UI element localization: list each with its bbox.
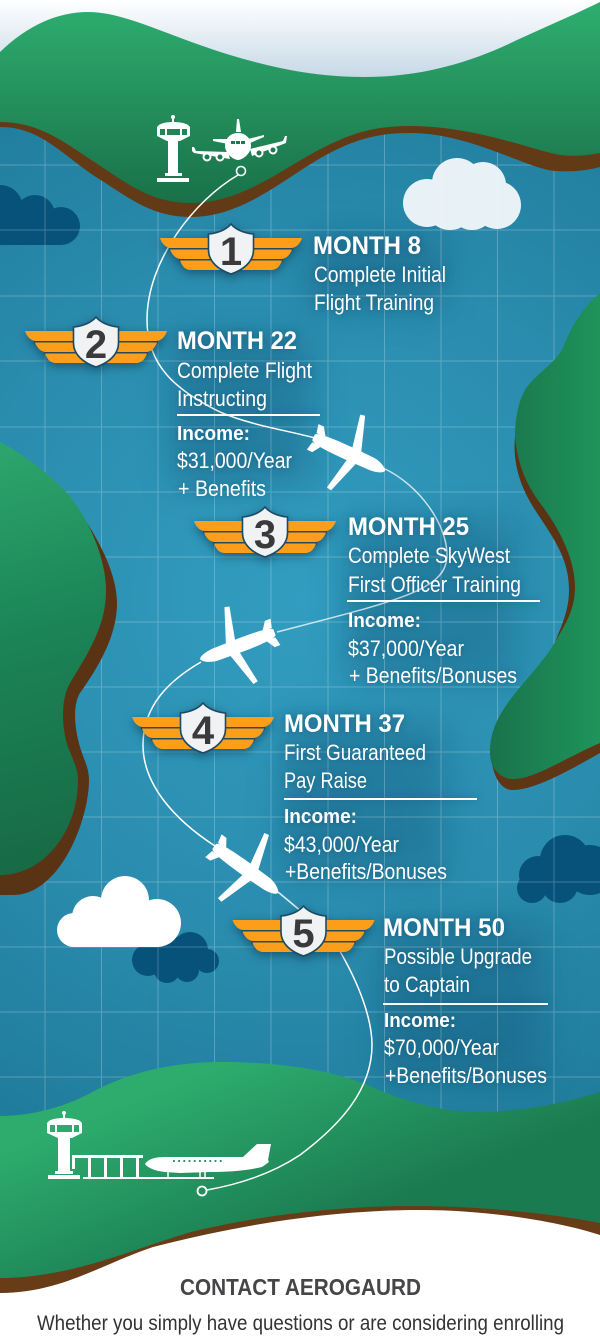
sea background [0,100,600,1150]
badge 3: 3 [254,513,276,557]
text block: month 25: First Officer Training [348,572,521,597]
badge 5: 5 [292,912,315,956]
cloud: dark lower [132,932,219,983]
text block: month 37: $43,000/Year [284,832,399,857]
text block: month 8 [313,232,446,315]
text block: month 25: + Benefits/Bonuses [349,663,517,688]
text block: month 50: +Benefits/Bonuses [385,1063,547,1088]
text block: month 50: Possible Upgrade [384,944,532,969]
cloud: light top right [403,158,521,230]
badge 4 [132,703,274,753]
badge 1: 1 [220,230,242,274]
badge 4: 4 [192,709,215,753]
icon: bottom tower and jet bridge [47,1111,214,1179]
icon: airplane 1 [296,400,402,507]
heading: contact: CONTACT AEROGAURD [180,1274,421,1300]
right island: brown side edge [515,437,600,642]
cloud: white lower [57,876,181,947]
text block: month 22: Complete Flight [177,358,313,383]
text block: month 25 [347,513,540,688]
sky gradient [0,0,600,100]
text block: month 50: MONTH 50 [383,914,505,942]
bottom hill: brown edge [0,1180,600,1293]
text block: month 25: $37,000/Year [348,636,464,661]
text block: month 22 [177,327,320,501]
top hill: green [0,2,600,203]
badge 2: 2 [85,323,107,367]
text block: month 25: MONTH 25 [348,513,469,541]
text block: month 22: Instructing [177,386,267,411]
text block: month 8: Complete Initial [314,262,446,287]
text block: month 50: Income: [384,1010,456,1032]
left island: brown edge [0,500,117,895]
right island: brown bottom edge [491,735,600,790]
text block: month 37: MONTH 37 [284,710,405,738]
flight path [143,166,447,1196]
text block: month 22: MONTH 22 [177,327,297,355]
text block: month 8: MONTH 8 [313,232,421,260]
text block: month 25: Income: [348,610,421,632]
text block: month 50: to Captain [384,972,470,997]
text block: month 50: $70,000/Year [384,1035,499,1060]
badge 1 [160,224,302,274]
text block: month 22: Income: [177,423,250,445]
cloud: dark left [0,185,80,245]
left island: green [0,442,106,875]
badge 2 [25,317,167,367]
icon: airplane 3 [190,812,302,926]
icon: top control tower [157,115,190,182]
bottom hill: green [0,1062,600,1278]
icon: bottom airplane side view [145,1144,271,1177]
text block: month 22: $31,000/Year [177,448,292,473]
icon: top airplane front view [192,119,287,160]
cloud: dark right [517,835,600,903]
text vignette shading [172,235,545,1080]
text block: month 37 [284,710,477,884]
right island: green [490,293,600,779]
text block: month 25: Complete SkyWest [348,543,511,568]
text block: month 8: Flight Training [314,290,434,315]
text block: month 50 [383,914,548,1088]
text block: month 37: First Guaranteed [284,740,426,765]
text block: month 37: Income: [284,806,357,828]
badge 3 [194,507,336,557]
top hill: brown edge [0,100,600,217]
text block: month 22: + Benefits [178,476,266,501]
text block: month 37: Pay Raise [284,768,367,793]
badge 5 [232,906,374,956]
icon: airplane 2 [186,594,290,698]
text block: month 37: +Benefits/Bonuses [285,859,447,884]
